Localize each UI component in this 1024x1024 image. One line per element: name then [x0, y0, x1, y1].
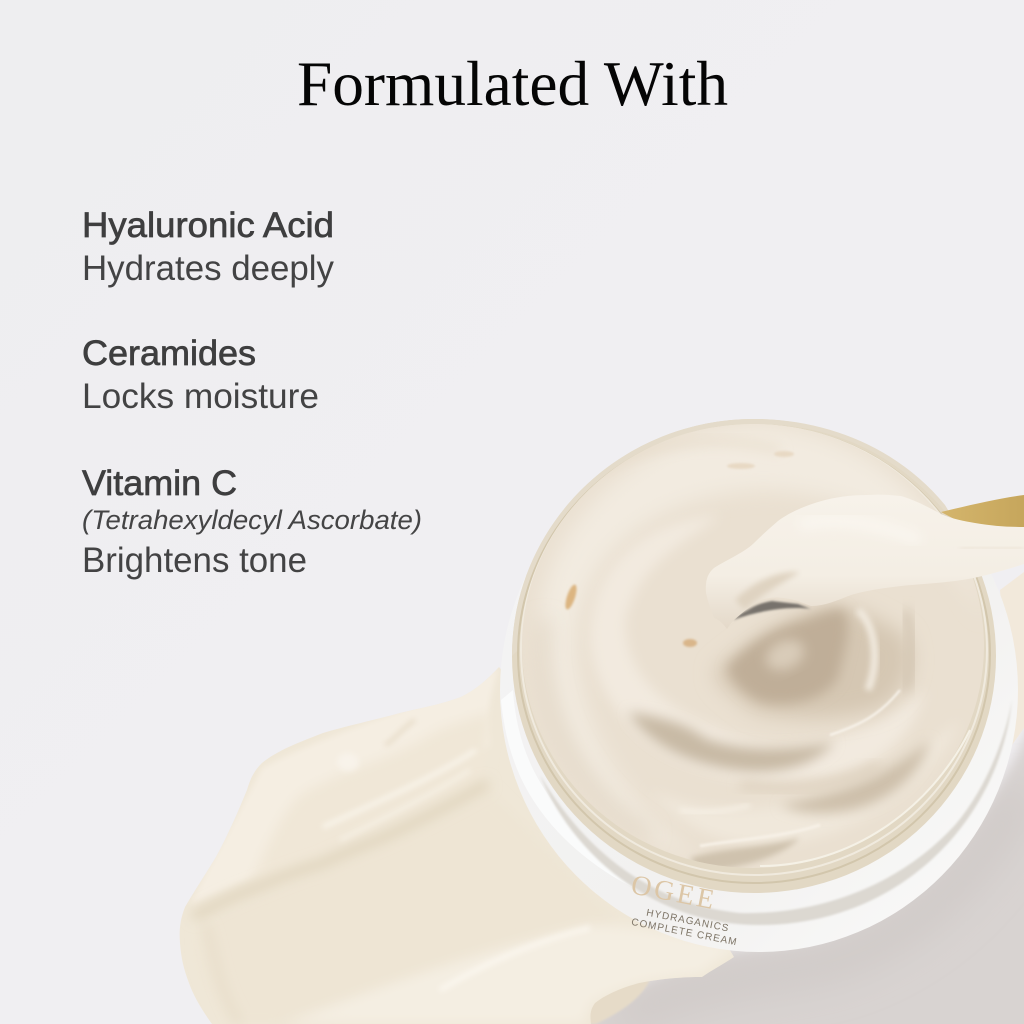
cream bottom fold shadows	[690, 838, 798, 868]
cream second band shadow	[628, 712, 835, 772]
ingredient: ceramides: Ceramides	[82, 334, 256, 373]
jar	[500, 419, 1018, 952]
cream inner bright swirl	[590, 515, 925, 782]
jar label: COMPLETE CREAM	[630, 917, 738, 948]
jar label: HYDRAGANICS	[645, 908, 730, 935]
ingredient: vitamin c: Vitamin C	[82, 464, 237, 503]
smear flat center	[199, 790, 620, 1024]
ingredient: ceramides: Locks moisture	[82, 377, 319, 416]
smear lower ridge	[316, 928, 723, 1021]
jar label	[623, 869, 747, 948]
jar cast shadow	[560, 715, 1024, 1024]
ingredient: hyaluronic acid	[82, 206, 334, 288]
cream on spatula	[706, 495, 1024, 629]
cream caramel flecks	[564, 584, 578, 610]
smear upper ridge	[190, 667, 499, 905]
ingredient: hyaluronic acid: Hydrates deeply	[82, 249, 334, 288]
jar lower neck shade	[540, 700, 1012, 925]
ingredient: vitamin c: (Tetrahexyldecyl Ascorbate)	[82, 505, 422, 535]
cream left edge fold	[540, 630, 642, 829]
cream outer bright band	[542, 427, 918, 826]
title: Formulated With	[297, 48, 728, 119]
cream rim gloss	[760, 730, 970, 866]
cream behind jar, right edge	[1000, 572, 1024, 745]
cream third band shadow	[780, 740, 930, 813]
cream in jar	[522, 424, 984, 868]
jar glass rim	[512, 419, 996, 893]
ingredient: vitamin c: Brightens tone	[82, 541, 307, 580]
ingredient: ceramides	[82, 334, 319, 416]
ingredient: vitamin c	[82, 464, 422, 580]
spatula dark underside	[733, 601, 811, 620]
cream central pit shadow	[715, 605, 911, 718]
jar label: OGEE	[629, 869, 720, 916]
ingredient: hyaluronic acid: Hyaluronic Acid	[82, 206, 334, 245]
ingredient list	[82, 206, 422, 580]
spatula with cream	[706, 495, 1024, 629]
jar white body	[500, 428, 1018, 952]
gold spatula	[941, 495, 1024, 532]
cream smear	[180, 667, 740, 1024]
smear under layer	[540, 980, 650, 1024]
